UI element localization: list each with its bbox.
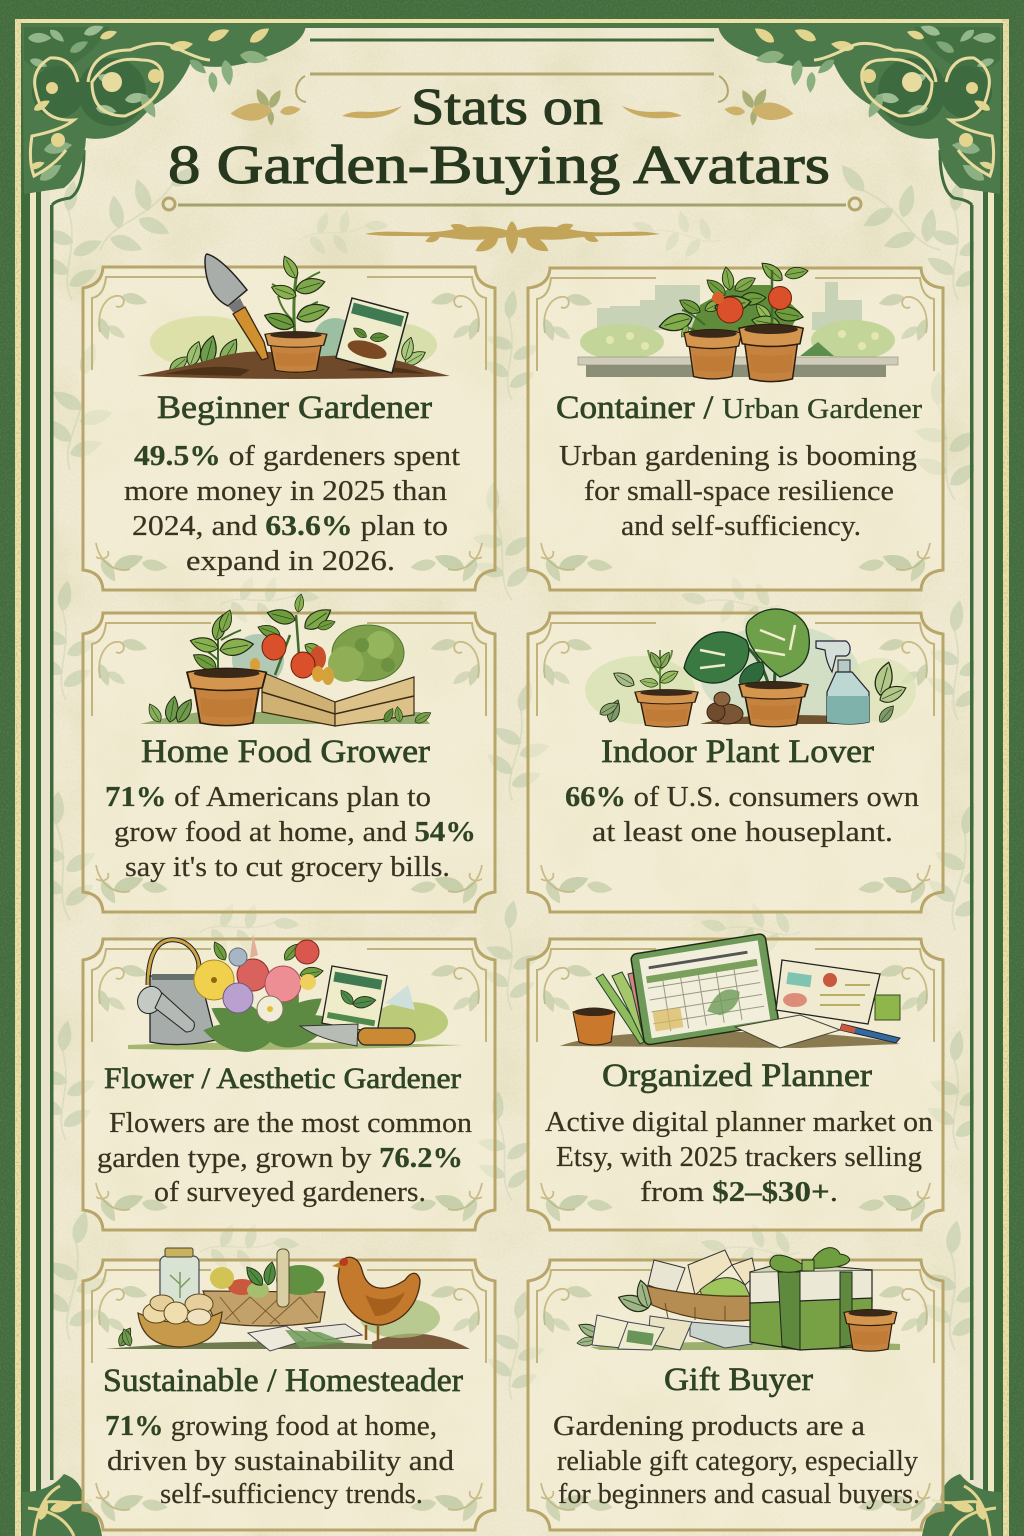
stat text xyxy=(105,1411,454,1510)
icon: tablet planner, notebook, rolled charts and pot xyxy=(560,933,900,1048)
stat text xyxy=(565,782,919,848)
heading: Container / Urban Gardener xyxy=(556,390,922,426)
stat text: from $2–$30+ . xyxy=(640,1177,838,1208)
stat text xyxy=(124,441,460,577)
icon: eggs, jar, vegetable basket and hen xyxy=(105,1248,470,1351)
icon: raised bed with tomatoes, lettuce and potted seedling xyxy=(140,593,433,726)
icon: two tomato pots on a city ledge xyxy=(578,259,898,382)
stat text: at least one houseplant. xyxy=(592,817,893,848)
stat text: 66% of U.S. consumers own xyxy=(565,782,919,813)
panel frame xyxy=(83,1260,495,1530)
heading: Home Food Grower xyxy=(141,734,430,770)
stat text xyxy=(105,782,476,883)
panel frame xyxy=(528,939,943,1230)
flourish: title right spray xyxy=(718,76,794,126)
title xyxy=(168,79,830,195)
corner ornament: bottom right xyxy=(922,1474,1002,1536)
stat text xyxy=(553,1411,920,1510)
icon: trowel, seedling in pot and seed packet xyxy=(137,254,450,379)
title: 8 Garden-Buying Avatars xyxy=(168,134,830,195)
panel frame xyxy=(83,613,495,912)
faint botanical background pattern xyxy=(20,138,1008,1403)
stat text: for beginners and casual buyers. xyxy=(558,1479,920,1510)
heading: Indoor Plant Lover xyxy=(601,734,874,770)
stat text: grow food at home, and 54% xyxy=(114,817,476,848)
stat text: of surveyed gardeners. xyxy=(154,1177,426,1208)
title: Stats on xyxy=(411,79,603,136)
stat text: 71% of Americans plan to xyxy=(105,782,431,813)
corner ornament: top right xyxy=(718,23,1002,194)
panel: Home Food Grower xyxy=(83,593,495,912)
stat text: driven by sustainability and xyxy=(107,1446,454,1477)
flourish: swashes beside title xyxy=(342,106,682,118)
panel: Organized Planner xyxy=(528,933,943,1230)
panel frame xyxy=(83,939,495,1230)
stat text: expand in 2026. xyxy=(186,546,395,577)
stat text xyxy=(97,1108,472,1208)
icon: watering can, bouquet, seed packet and trowel xyxy=(128,934,463,1056)
stat text: Etsy, with 2025 trackers selling xyxy=(556,1142,922,1173)
panel frame xyxy=(528,1260,943,1530)
stat text: for small-space resilience xyxy=(584,476,894,507)
panel: Indoor Plant Lover xyxy=(528,609,943,912)
stat text: Active digital planner market on xyxy=(545,1107,933,1138)
panel frame xyxy=(528,613,943,912)
stat text: self-sufficiency trends. xyxy=(160,1479,423,1510)
panel frame xyxy=(83,267,495,590)
panel frame xyxy=(528,268,943,590)
stat text: Urban gardening is booming xyxy=(559,441,917,472)
stat text: 71% growing food at home, xyxy=(105,1411,437,1442)
flourish: title left spray xyxy=(230,76,306,126)
center ornament under title xyxy=(365,221,660,256)
stat text: garden type, grown by 76.2% xyxy=(97,1143,463,1174)
heading: Flower / Aesthetic Gardener xyxy=(104,1062,461,1095)
stat text: 49.5% of gardeners spent xyxy=(134,441,460,472)
icon: houseplants, monstera and spray bottle xyxy=(585,609,916,727)
stat text: Flowers are the most common xyxy=(109,1108,472,1139)
heading: Gift Buyer xyxy=(664,1362,813,1398)
stat text xyxy=(559,441,917,542)
stat text: and self-sufficiency. xyxy=(621,511,861,542)
stat text: reliable gift category, especially xyxy=(557,1446,918,1477)
panel: Sustainable / Homesteader xyxy=(83,1248,495,1530)
corner ornament: bottom left xyxy=(22,1474,102,1536)
corner ornament: top left xyxy=(22,23,306,194)
panel: Beginner Gardener xyxy=(83,254,495,590)
stat text: say it's to cut grocery bills. xyxy=(125,852,450,883)
heading: Beginner Gardener xyxy=(157,390,432,426)
stat text: Gardening products are a xyxy=(553,1411,866,1442)
stat text xyxy=(545,1107,933,1208)
rule under title xyxy=(163,198,861,210)
stat text: more money in 2025 than xyxy=(124,476,447,507)
panel: Flower / Aesthetic Gardener xyxy=(83,934,495,1230)
heading: Organized Planner xyxy=(602,1058,872,1094)
heading: Sustainable / Homesteader xyxy=(103,1363,463,1399)
icon: gift box, basket of seed packets, pot and books xyxy=(576,1248,900,1351)
panel: Gift Buyer xyxy=(528,1248,943,1530)
stat text: 2024, and 63.6% plan to xyxy=(132,511,448,542)
panel: Container / Urban Gardener xyxy=(528,259,943,590)
